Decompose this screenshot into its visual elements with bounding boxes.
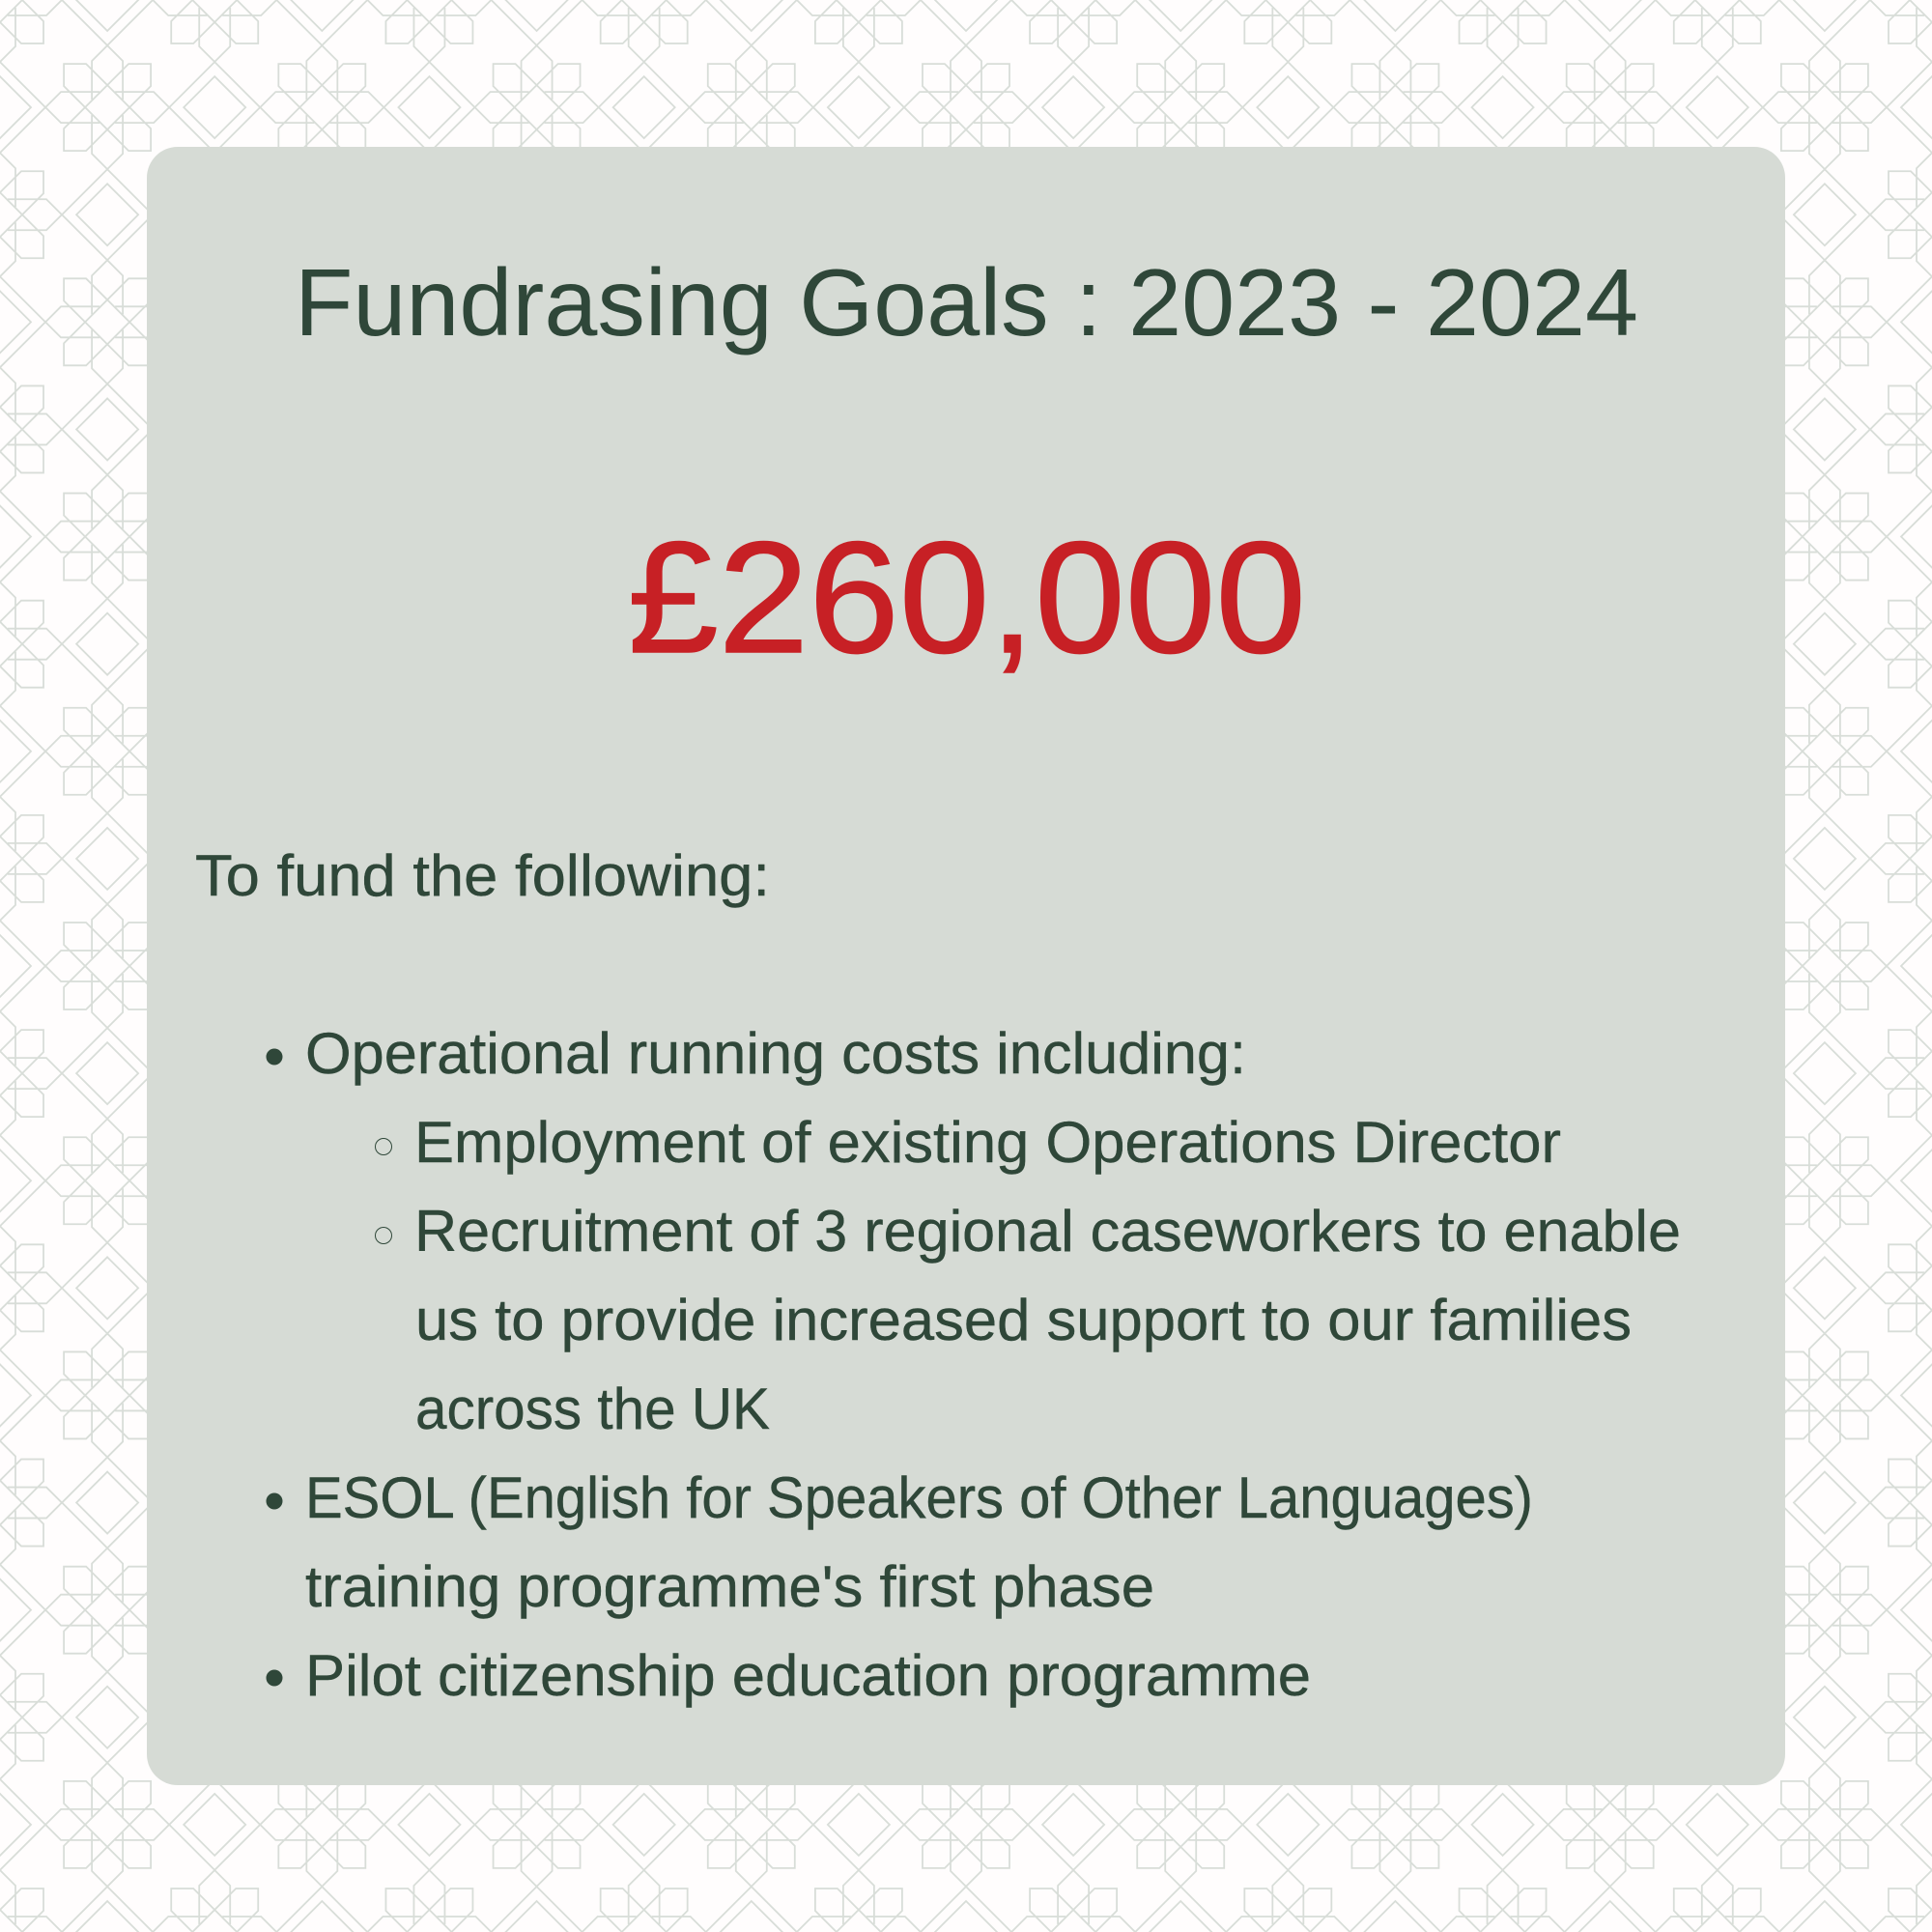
panel: fundraising goals [147,147,1785,1785]
list item: ESOL training: training programme's first phase [305,1554,1154,1619]
title: Fundrasing Goals : 2023 - 2024 [295,249,1638,355]
list item: operational running costs: Operational running costs including: [305,1021,1246,1086]
fundraising target amount: £260,000 [628,509,1306,686]
sub-item: regional caseworkers: Recruitment of 3 regional caseworkers to enable [414,1199,1681,1264]
list item: ESOL training: ESOL (English for Speakers of Other Languages) [305,1465,1533,1530]
sub-item: regional caseworkers: us to provide increased support to our families [415,1288,1632,1352]
sub-item: regional caseworkers [375,1199,1681,1441]
list item: citizenship education: Pilot citizenship education programme [305,1643,1311,1708]
sub-item: operations director: Employment of existing Operations Director [414,1110,1561,1175]
intro text: To fund the following: [195,843,770,908]
sub-item: regional caseworkers: across the UK [415,1377,770,1441]
list item: ESOL training [267,1465,1533,1619]
